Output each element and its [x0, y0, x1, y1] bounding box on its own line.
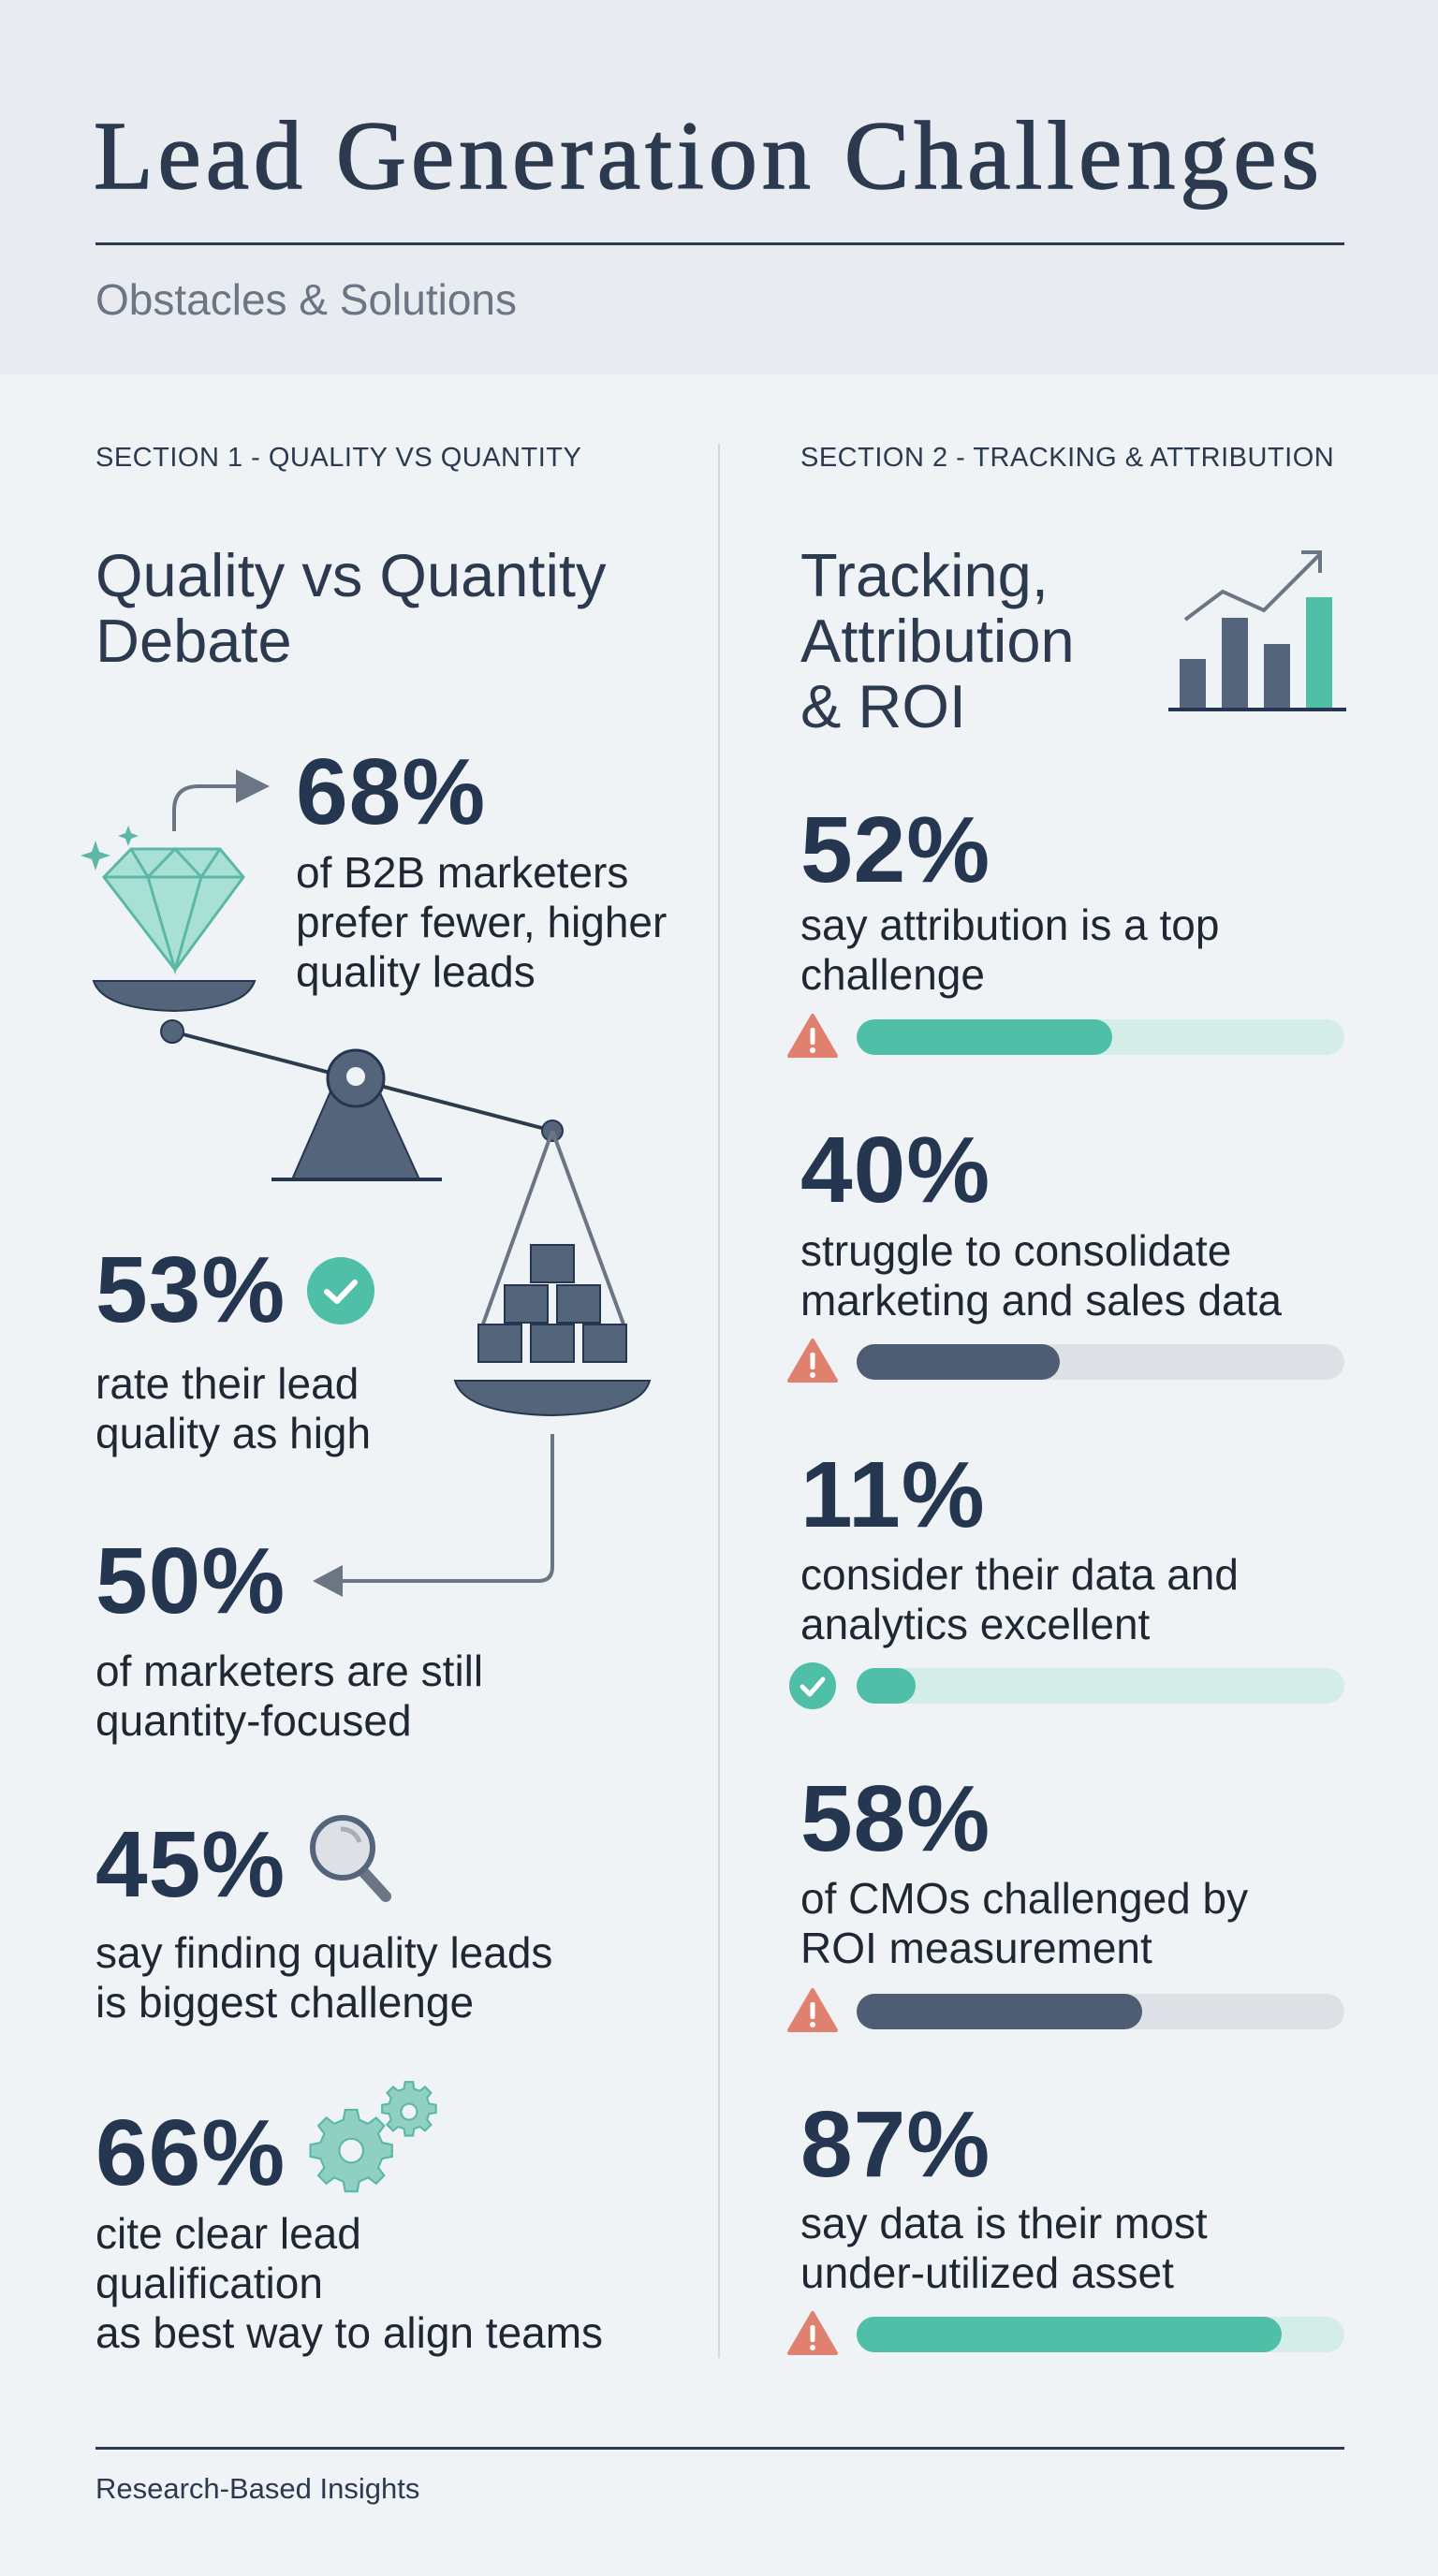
stat: 45%: is biggest challenge: [95, 1978, 474, 2027]
stat: 52%: 52%: [800, 798, 990, 902]
heading: quality vs quantity: Debate: [95, 607, 292, 675]
icon: warning 4: [787, 2310, 839, 2355]
title: Lead Generation Challenges: [94, 102, 1324, 210]
subtitle: Obstacles & Solutions: [95, 275, 517, 324]
stat: 53%: quality as high: [95, 1409, 371, 1457]
stat: 50%: 50%: [95, 1529, 286, 1633]
stat: 52%: say attribution is a top: [800, 900, 1219, 949]
icon: check small: [789, 1662, 836, 1709]
heading: tracking: Tracking,: [800, 541, 1049, 609]
bar: 40%: [857, 1344, 1344, 1380]
stat: 52%: [800, 798, 1219, 999]
stat: 40%: struggle to consolidate: [800, 1226, 1231, 1275]
stat: 66%: [95, 2081, 603, 2357]
heading: tracking: & ROI: [800, 672, 966, 740]
stat: 66%: 66%: [95, 2100, 286, 2205]
stat: 87%: say data is their most: [800, 2199, 1208, 2247]
stat: 87%: [800, 2092, 1208, 2297]
stat: 68%: of B2B marketers: [296, 848, 628, 897]
stat: 11%: consider their data and: [800, 1550, 1239, 1599]
stat: 11%: analytics excellent: [800, 1600, 1150, 1648]
stat: 66%: qualification: [95, 2259, 323, 2307]
stat: 45%: 45%: [95, 1812, 286, 1917]
bar: 87%: [857, 2317, 1344, 2352]
icon: gears: [309, 2081, 437, 2192]
stat: 40%: [800, 1118, 1282, 1325]
stat: 58%: ROI measurement: [800, 1924, 1152, 1972]
stat: 50%: quantity-focused: [95, 1696, 412, 1745]
footer text: Research-Based Insights: [95, 2472, 419, 2505]
illustration: balance scale: [81, 769, 652, 1597]
stat: 58%: of CMOs challenged by: [800, 1874, 1248, 1923]
icon: warning 1: [787, 1013, 839, 1058]
stat: 87%: under-utilized asset: [800, 2248, 1174, 2297]
stat: 53%: rate their lead: [95, 1359, 359, 1408]
stat: 52%: challenge: [800, 950, 985, 999]
stat: 50%: [95, 1529, 483, 1745]
stat: 66%: cite clear lead: [95, 2209, 361, 2258]
stat: 53%: 53%: [95, 1237, 286, 1342]
stat: 58%: [800, 1766, 1248, 1972]
stat: 68%: quality leads: [296, 947, 536, 996]
heading: tracking: [800, 541, 1075, 740]
header band: [0, 0, 1438, 374]
stat: 68%: 68%: [296, 739, 486, 844]
stat: 50%: of marketers are still: [95, 1647, 483, 1695]
stat: 68%: [296, 739, 667, 996]
section 1 label: SECTION 1 - QUALITY VS QUANTITY: [95, 443, 581, 473]
stat: 68%: prefer fewer, higher: [296, 898, 667, 946]
icon: warning 3: [787, 1988, 839, 2032]
stat: 45%: [95, 1812, 552, 2027]
stat: 58%: 58%: [800, 1766, 990, 1871]
stat: 53%: [95, 1237, 374, 1457]
heading: quality vs quantity: Quality vs Quantity: [95, 541, 607, 609]
section 2 label: SECTION 2 - TRACKING & ATTRIBUTION: [800, 443, 1334, 473]
bar: 11%: [857, 1668, 1344, 1704]
bar: 58%: [857, 1994, 1344, 2029]
stat: 87%: 87%: [800, 2092, 990, 2197]
stat: 40%: marketing and sales data: [800, 1276, 1282, 1325]
icon: magnifier: [310, 1815, 391, 1902]
stat: 66%: as best way to align teams: [95, 2308, 603, 2357]
stat: 11%: 11%: [800, 1442, 986, 1547]
stat: 45%: say finding quality leads: [95, 1928, 552, 1977]
stat: 11%: [800, 1442, 1239, 1648]
icon: bar chart: [1168, 550, 1346, 711]
icon: check: [307, 1257, 374, 1325]
bar: 52%: [857, 1019, 1344, 1055]
stat: 40%: 40%: [800, 1118, 990, 1222]
heading: tracking: Attribution: [800, 607, 1075, 675]
icon: warning 2: [787, 1339, 839, 1383]
heading: quality vs quantity: [95, 541, 607, 675]
